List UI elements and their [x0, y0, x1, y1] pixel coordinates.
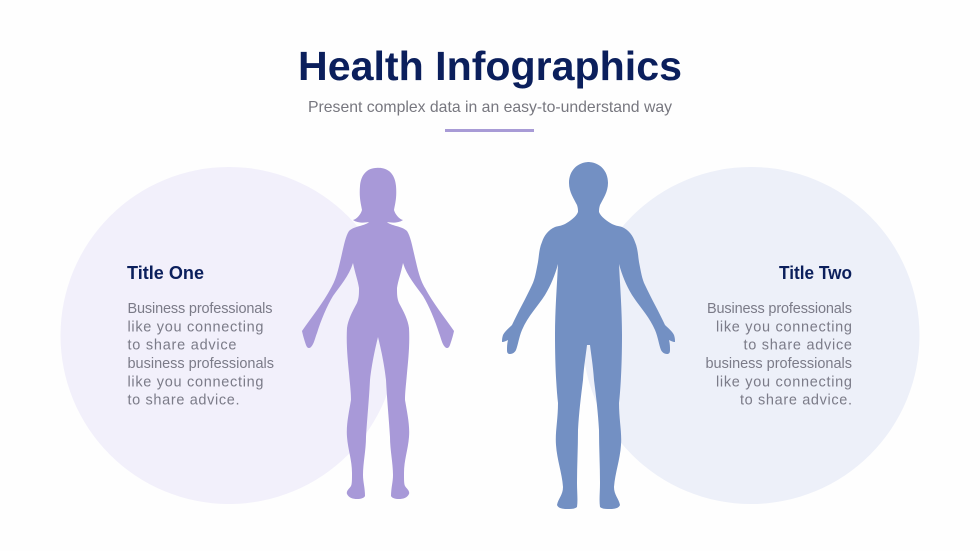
icon: female silhouette	[302, 168, 454, 499]
text block: right description: like you connecting	[716, 319, 852, 335]
text block: right description: to share advice.	[740, 393, 852, 409]
text block: left description: like you connecting	[128, 319, 264, 335]
text block: left description: to share advice.	[128, 393, 240, 409]
heading: Title One: Title One	[127, 263, 204, 283]
panel: right circle with Title Two	[582, 167, 920, 504]
text block: left description: to share advice	[128, 338, 236, 354]
title underline	[445, 129, 534, 132]
text block: left description: like you connecting	[128, 374, 264, 390]
subtitle: Present complex data in an easy-to-understand way	[308, 99, 672, 116]
header	[298, 43, 682, 132]
text block: right description: like you connecting	[716, 374, 852, 390]
text block: right description: business professionals	[706, 356, 852, 372]
icon: male silhouette	[502, 162, 675, 509]
panel: left circle with Title One	[60, 167, 398, 504]
text block: right description: Business professionals	[707, 301, 852, 317]
title: Health Infographics	[298, 43, 682, 89]
heading: Title Two: Title Two	[779, 263, 852, 283]
text block: left description: Business professionals	[128, 301, 272, 317]
left background circle	[60, 167, 398, 504]
text block: right description	[706, 301, 852, 409]
text block: left description: business professionals	[128, 356, 274, 372]
right background circle	[582, 167, 920, 504]
text block: left description	[128, 301, 274, 409]
text block: right description: to share advice	[744, 338, 852, 354]
